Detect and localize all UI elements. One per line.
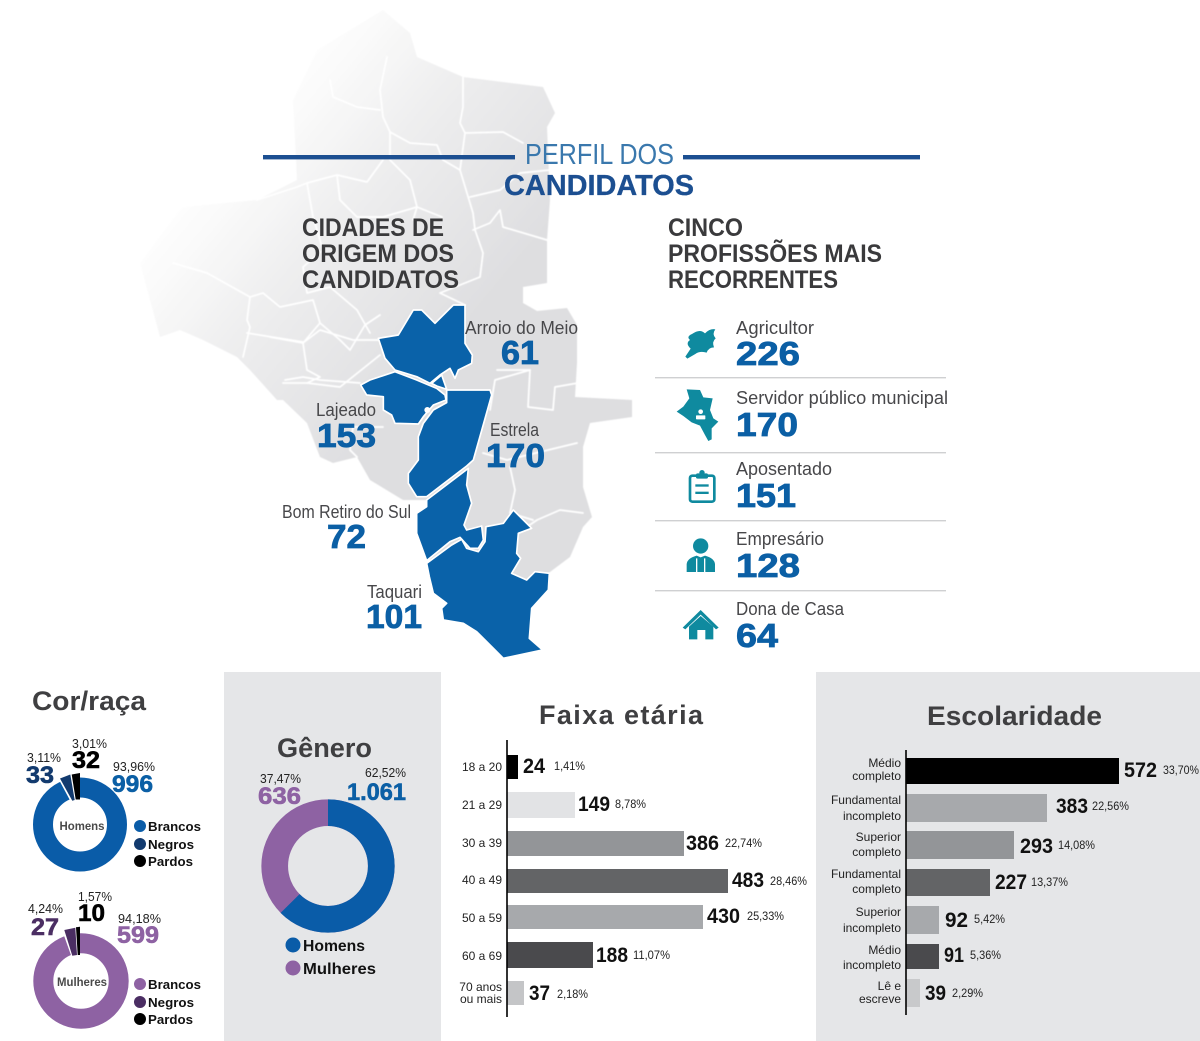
bar chart: escolaridade: 5,42% [974,914,1005,926]
heading: cidades de origem: CIDADES DE [302,214,444,242]
bar chart: faixa etária: 37 [529,982,550,1005]
bar chart: escolaridade: 2,29% [952,988,983,1000]
profession: Agricultor [685,318,814,372]
profession: Aposentado: 151 [736,477,796,514]
profession: Empresário: Empresário [736,529,824,549]
values: mulheres: 4,24% [28,902,63,916]
bar chart: faixa etária: 50 a 59 [462,911,502,925]
bar chart: escolaridade: incompleto [843,809,901,823]
legend: homens [134,819,201,869]
map: highlighted cities [361,305,549,658]
values: gênero: 636 [258,783,301,810]
bar chart: escolaridade: Fundamental [831,793,901,807]
bar chart: faixa etária: 430 [707,905,740,928]
heading: cidades de origem: CANDIDATOS [302,266,459,294]
profession: Dona de Casa: 64 [736,617,779,654]
values: homens: 33 [26,762,54,789]
heading: cor/raça: Cor/raça [32,686,147,716]
bar chart: escolaridade: 572 [1124,759,1157,782]
legend: homens: Pardos [148,854,193,869]
icon: clipboard [690,470,714,502]
bar chart: faixa etária [459,740,807,1017]
city label: Lajeado [316,400,376,454]
bar chart: faixa etária: ou mais [460,992,502,1006]
values: mulheres: 10 [78,900,105,927]
bar chart: escolaridade: 13,37% [1031,877,1068,889]
heading: cinco profissões [668,214,882,294]
profession: Servidor público municipal: Servidor público municipal [736,388,948,408]
city label: Estrela: 170 [486,437,545,474]
legend: mulheres: Negros [148,995,194,1010]
title: CANDIDATOS [504,170,694,202]
city label: Taquari [366,582,422,635]
heading: faixa etária: Faixa etária [539,700,704,730]
profession: Dona de Casa [683,599,845,654]
heading: escolaridade: Escolaridade [927,701,1102,731]
profession: Dona de Casa: Dona de Casa [736,599,845,619]
city label: Bom Retiro do Sul: Bom Retiro do Sul [282,502,411,522]
city label: Estrela [486,420,545,474]
legend: gênero: Mulheres [303,961,376,978]
bar chart: faixa etária: 28,46% [770,876,807,888]
city label: Taquari: 101 [366,598,422,635]
donut chart: gênero [275,813,381,919]
bar chart: escolaridade: completo [852,769,901,783]
icon: municipal map [677,389,718,441]
bar chart: faixa etária: 8,78% [615,799,646,811]
bar chart: faixa etária: 11,07% [633,950,670,962]
legend: gênero [286,938,376,978]
values: homens: 93,96% [113,760,155,774]
title [263,139,920,202]
bar chart: escolaridade: 383 [1056,795,1088,818]
bar chart: escolaridade: 14,08% [1058,840,1095,852]
city label: Bom Retiro do Sul [282,502,411,555]
heading: cinco profissões: PROFISSÕES MAIS [668,238,882,268]
bar chart: escolaridade: incompleto [843,921,901,935]
profession: Empresário: 128 [736,547,800,584]
legend: homens: Negros [148,837,194,852]
bar chart: faixa etária: 25,33% [747,911,784,923]
icon: business person [687,538,715,572]
bar chart: escolaridade: 5,36% [970,950,1001,962]
bar chart: escolaridade: Superior [856,830,901,844]
bar chart: faixa etária: 60 a 69 [462,949,502,963]
values: mulheres: 94,18% [118,912,161,926]
profession: Aposentado: Aposentado [736,459,832,479]
heading: cidades de origem [302,214,459,294]
bar chart: escolaridade: 92 [945,909,968,932]
values: gênero [258,766,406,810]
values: gênero: 37,47% [260,772,301,786]
heading: cidades de origem: ORIGEM DOS [302,240,454,268]
bar chart: escolaridade: escreve [859,992,901,1006]
bar chart: faixa etária: 18 a 20 [462,760,502,774]
profession dividers [655,377,946,591]
legend: mulheres [134,977,201,1027]
bar chart: escolaridade: Lê e [878,979,901,993]
bar chart: faixa etária: 386 [686,832,719,855]
city label: Taquari: Taquari [367,582,422,602]
bar chart: escolaridade: completo [852,882,901,896]
profession: Servidor público municipal [677,388,948,443]
title: PERFIL DOS [525,139,674,171]
bar chart: faixa etária: 70 anos [459,980,502,994]
values: homens: 996 [112,771,153,798]
bar chart: faixa etária: 21 a 29 [462,798,502,812]
values: homens [26,737,155,798]
bar chart: faixa etária: 188 [596,944,628,967]
donut chart: homens: Homens [60,821,104,833]
donut chart: mulheres [43,925,119,1019]
bar chart: escolaridade: 22,56% [1092,801,1129,813]
bar chart: faixa etária: 30 a 39 [462,836,502,850]
bar chart: escolaridade: 293 [1020,835,1053,858]
bar chart: faixa etária: 483 [732,869,764,892]
values: homens: 3,11% [27,751,61,765]
bar chart: escolaridade: incompleto [843,958,901,972]
bar chart: escolaridade: Superior [856,905,901,919]
bar chart: escolaridade: Fundamental [831,867,901,881]
legend: mulheres: Brancos [148,977,201,992]
bar chart: faixa etária: 24 [523,755,545,778]
bar chart: escolaridade: Médio [868,943,901,957]
values: mulheres: 27 [31,914,59,941]
bar chart: escolaridade: 91 [944,944,964,967]
values: homens: 3,01% [72,737,107,751]
legend: gênero: Homens [303,938,365,955]
heading: cinco profissões: RECORRENTES [668,266,838,294]
city label: Arroio do Meio: 61 [501,334,539,371]
donut chart: mulheres: Mulheres [57,977,107,989]
values: gênero: 62,52% [365,766,406,780]
profession: Servidor público municipal: 170 [736,406,798,443]
city label: Lajeado: Lajeado [316,400,376,420]
bar chart: faixa etária: 22,74% [725,838,762,850]
values: mulheres: 599 [117,922,159,949]
values: mulheres: 1,57% [78,890,112,904]
bar chart: faixa etária: 149 [578,793,610,816]
icon: house [683,610,719,639]
bar chart: escolaridade [831,750,1199,1015]
bar chart: faixa etária: 40 a 49 [462,873,502,887]
panel: escolaridade background [816,672,1200,1041]
icon: leaf [685,329,716,359]
values: mulheres [28,890,161,949]
values: gênero: 1.061 [347,779,406,806]
map: gray region background [140,10,632,600]
city label: Lajeado: 153 [317,417,376,454]
city label: Arroio do Meio [465,318,578,371]
city label: Bom Retiro do Sul: 72 [327,518,366,555]
bar chart: escolaridade: 39 [925,982,946,1005]
profession: Agricultor: Agricultor [736,318,814,338]
profession: Empresário [687,529,824,584]
profession: Agricultor: 226 [736,335,800,372]
donut chart: homens [43,770,117,862]
legend: mulheres: Pardos [148,1012,193,1027]
bar chart: escolaridade: 227 [995,871,1027,894]
bar chart: faixa etária: 1,41% [554,761,585,773]
city label: Estrela: Estrela [490,420,540,440]
panel: gênero background [224,672,441,1041]
values: homens: 32 [72,747,100,774]
city label: Arroio do Meio: Arroio do Meio [465,318,578,338]
heading: cinco profissões: CINCO [668,214,743,242]
bar chart: escolaridade: completo [852,845,901,859]
legend: homens: Brancos [148,819,201,834]
profession: Aposentado [690,459,832,514]
heading: gênero: Gênero [277,733,372,763]
bar chart: escolaridade: Médio [868,756,901,770]
bar chart: faixa etária: 2,18% [557,989,588,1001]
